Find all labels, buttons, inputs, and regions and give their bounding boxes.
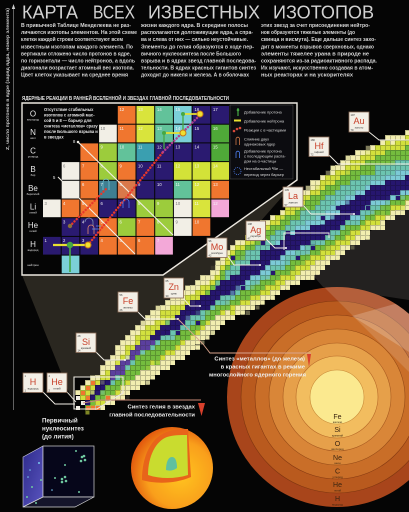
element card: He: гелий xyxy=(53,386,61,390)
caption: metals synthesis: многослойного ядерного горения xyxy=(209,372,306,378)
element card: Zn: 65 xyxy=(166,279,169,283)
cell numbers: 15 xyxy=(194,126,200,131)
leader end dots xyxy=(124,213,355,361)
element row labels: Be xyxy=(28,184,38,193)
element card: Mo: Mo xyxy=(211,242,223,252)
cell numbers: 6 xyxy=(120,220,122,224)
cell numbers: 11 xyxy=(138,144,143,150)
element row labels: углерод xyxy=(28,154,38,158)
cell numbers: 4 xyxy=(82,220,85,224)
cell numbers: 12 xyxy=(176,164,181,168)
element card: Fe: 56 xyxy=(120,293,123,297)
text block: column 3: сохраняются из-за радиоактивного распада. xyxy=(261,58,377,64)
cell numbers: 10 xyxy=(157,182,162,187)
cell numbers: 10 xyxy=(100,126,106,131)
title xyxy=(22,2,374,22)
small star: cut-away xyxy=(131,427,213,509)
element card: Si: 28 xyxy=(78,334,81,338)
element card: Zn: Zn xyxy=(168,282,179,292)
caption: primordial nucleosynthesis: нуклеосинтез xyxy=(42,426,84,432)
element card: He xyxy=(47,373,67,392)
element card: La: La xyxy=(288,191,298,201)
element card: Zn: цинк xyxy=(171,292,177,296)
text block: column 1: по горизонтали — число нейтронов, а вдоль xyxy=(21,58,135,64)
cell numbers: 7 xyxy=(120,201,122,206)
element card: Fe xyxy=(118,292,138,312)
cell numbers: 8 xyxy=(157,220,160,224)
text block: column 3: этих звезд за счет присоединения нейтро- xyxy=(261,22,370,29)
pink pointer: metals xyxy=(178,319,311,353)
cell numbers: 8 xyxy=(100,164,104,168)
element card: Mo: молибден xyxy=(211,252,223,255)
element card: H: 1 xyxy=(24,374,26,378)
big star element labels: O xyxy=(335,441,341,448)
cell numbers: 4 xyxy=(63,201,66,206)
text block: column 3: дит в моменты взрывов сверхновых, однако xyxy=(261,44,375,50)
inset heading: ЯДЕРНЫЕ РЕАКЦИИ В РАННЕЙ ВСЕЛЕННОЙ И ЗВЕЗДАХ ГЛАВНОЙ ПОСЛЕДОВАТЕЛЬНОСТИ xyxy=(22,94,229,102)
element card: Au: 79 xyxy=(350,128,354,132)
element card: Ag xyxy=(246,221,266,240)
big star element labels: кислород xyxy=(331,447,344,451)
reaction arcs xyxy=(85,179,129,234)
element row labels: гелий xyxy=(29,229,37,233)
element row labels: O xyxy=(30,110,36,118)
barrier labels xyxy=(53,139,76,180)
cell numbers: 11 xyxy=(176,182,181,187)
element card: Au: 197 xyxy=(350,113,355,117)
element card: Hf: Hf xyxy=(314,141,324,151)
icon: early universe cube xyxy=(23,446,94,507)
element card: Ag: серебро xyxy=(250,234,262,238)
vertical axis: Z: Z, число протонов в ядре (заряд ядра, номер элемента) xyxy=(5,8,11,150)
cell numbers: 3 xyxy=(44,201,48,206)
element card: Fe: 26 xyxy=(120,308,123,312)
barrier note: после Большого взрыва и xyxy=(44,129,98,134)
legend: одинаковых ядер xyxy=(244,142,275,146)
text block: column 3: Их изучают, искусственно создавая в атом- xyxy=(261,66,373,72)
text block: column 1: известным изотопам каждого элемента. По xyxy=(21,44,134,50)
cell numbers: 10 xyxy=(194,220,200,224)
barrier lines xyxy=(58,141,173,254)
element card: He: 2 xyxy=(48,388,50,392)
cell numbers: 11 xyxy=(194,201,200,206)
element card: H: 1 xyxy=(24,388,26,392)
big star element labels: Fe xyxy=(333,414,342,421)
big star element labels: Si xyxy=(334,427,341,434)
barrier note: Отсутствие стабильных xyxy=(44,107,94,112)
element card: Ag: Ag xyxy=(250,225,261,235)
cell numbers: 13 xyxy=(213,182,218,187)
cell numbers: 10 xyxy=(138,164,143,168)
cell numbers: 9 xyxy=(120,164,122,168)
cell numbers: 7 xyxy=(100,182,104,187)
cell numbers: 12 xyxy=(120,107,125,112)
cell numbers: 12 xyxy=(194,182,200,187)
cell numbers: 13 xyxy=(194,164,200,168)
element card: Si: Si xyxy=(82,337,90,347)
cell numbers: 5 xyxy=(100,220,104,224)
element row labels: бор xyxy=(31,173,36,177)
cell numbers: 6 xyxy=(100,201,104,206)
element card: Au: золото xyxy=(355,126,364,130)
big star element labels: железо xyxy=(333,420,343,424)
text block: column 1: В привычной Таблице Менделеева не раз- xyxy=(21,22,131,29)
element row labels: H xyxy=(30,240,36,249)
element card: Zn: 30 xyxy=(166,294,169,298)
cell numbers: 3 xyxy=(63,220,66,224)
text block: column 2: располагаются долгоживущие ядра, а спра- xyxy=(141,30,253,36)
element row labels: литий xyxy=(29,210,37,214)
element row labels: водород xyxy=(28,248,39,252)
element card: Mo: 42 xyxy=(208,254,212,258)
element card: Ag: 108 xyxy=(248,222,252,226)
cell numbers: 10 xyxy=(176,201,181,206)
cell numbers: 1 xyxy=(44,238,48,243)
cell numbers: 15 xyxy=(213,144,218,150)
text block: column 2: взрыва и в ядрах звезд главной последова- xyxy=(141,58,256,64)
element card: H: водород xyxy=(28,386,39,390)
element card: Hf: 180 xyxy=(310,138,315,142)
big star element labels: C xyxy=(335,468,340,476)
caption: helium synthesis xyxy=(109,404,196,418)
big star element labels: углерод xyxy=(332,475,343,479)
element row labels: азот xyxy=(30,136,36,140)
cell numbers: 12 xyxy=(157,144,162,150)
cell numbers: 14 xyxy=(213,164,218,168)
element row labels: Li xyxy=(30,202,36,212)
barrier labels: 5 xyxy=(53,175,56,180)
cell numbers: 9 xyxy=(157,201,160,206)
cell numbers: 4 xyxy=(100,238,104,243)
legend: Слияние двух xyxy=(244,136,269,142)
element row labels: B xyxy=(30,165,36,174)
element row labels: He xyxy=(28,221,39,230)
barrier note: сой 5 и 8 — барьер для xyxy=(44,118,92,123)
cell numbers: 7 xyxy=(82,164,85,168)
barrier note: синтеза «металлов» сразу xyxy=(44,124,98,128)
element card: Mo xyxy=(207,238,227,258)
text block: column 2: тельности. В ядрах красных гигантов синтез xyxy=(141,66,256,72)
element row labels: бериллий xyxy=(27,192,40,196)
cell numbers: 11 xyxy=(157,164,162,168)
text block: column 2: ва и слева от них — сильно неустойчивые. xyxy=(141,36,248,43)
element card: Au xyxy=(349,112,369,132)
cell numbers: 16 xyxy=(194,107,200,112)
cell numbers: 2 xyxy=(63,238,66,243)
cell numbers: 16 xyxy=(213,126,218,131)
isotope band xyxy=(76,130,409,412)
element row labels: C xyxy=(30,146,36,156)
legend xyxy=(230,105,293,179)
text block: column 2: жизни каждого ядра. В середине полосы xyxy=(140,23,248,29)
text block: column 1: вертикали отложено число протонов в ядре, xyxy=(21,51,131,57)
caption: primordial nucleosynthesis: (до лития) xyxy=(42,434,74,440)
text block: column 2 xyxy=(140,23,256,79)
cell numbers: 14 xyxy=(176,126,181,131)
legend: Нестабильный ⁸Be — xyxy=(244,166,283,171)
cell numbers: 7 xyxy=(138,220,141,224)
big star element labels: неон xyxy=(334,461,341,465)
cell numbers: 9 xyxy=(176,220,178,224)
big star element labels: гелий xyxy=(334,488,342,492)
element card: La xyxy=(283,187,303,207)
big star element labels: кремний xyxy=(332,434,343,438)
title: ИЗОТОПОВ xyxy=(273,2,374,22)
element card: Zn xyxy=(164,278,184,298)
title: ИЗВЕСТНЫХ xyxy=(148,2,260,22)
cell numbers: 5 xyxy=(120,238,122,243)
caption: helium synthesis: главной последовательности xyxy=(109,412,195,418)
text block: column 2: вичного нуклеосинтеза после Большого xyxy=(141,51,242,57)
cell numbers: 9 xyxy=(100,144,104,150)
barrier note: в звездах xyxy=(44,134,64,140)
projection wedge: inset to band xyxy=(22,180,297,405)
caption: primordial nucleosynthesis: Первичный xyxy=(42,418,78,424)
vertical axis: Z xyxy=(5,4,15,410)
small frame around light elements xyxy=(74,377,123,409)
element card: Si xyxy=(76,333,96,352)
cell numbers: 14 xyxy=(194,144,200,150)
marker: metals synthesis xyxy=(307,354,311,367)
big star element labels: водород xyxy=(332,502,343,506)
element card: Fe: Fe xyxy=(123,296,133,306)
text block: column 1: диагонали возрастает атомный вес изотопа. xyxy=(21,65,134,72)
big star: layered burning shells xyxy=(227,280,409,507)
text block: column 3: нов образуются тяжелые элементы (до xyxy=(261,29,355,36)
element card: Si: кремний xyxy=(81,346,92,350)
caption: metals synthesis xyxy=(209,356,306,378)
element card: Hf: гафний xyxy=(314,150,324,154)
cell numbers: 12 xyxy=(138,126,143,131)
element card: H: H xyxy=(30,377,36,387)
caption: metals synthesis: Синтез «металлов» (до железа) xyxy=(214,356,305,362)
cell numbers: 9 xyxy=(138,182,141,187)
cell numbers: 5 xyxy=(82,201,85,206)
big star element labels xyxy=(331,414,344,506)
cell numbers: 15 xyxy=(176,107,181,112)
cell numbers: 12 xyxy=(213,201,218,206)
barrier note: изотопов с атомной мас- xyxy=(44,112,95,118)
inset panel: nuclear reactions xyxy=(22,94,297,275)
legend: Добавление нейтрона xyxy=(244,118,285,124)
text block: column 1: личаются изотопы элементов. На этой схеме xyxy=(21,29,137,36)
caption: helium synthesis: Синтез гелия в звездах xyxy=(128,404,196,410)
element card: La: 139 xyxy=(284,188,289,192)
text block: column 3: элементы тяжелее урана в природе не xyxy=(261,51,369,57)
text block: column 3: свинца и висмута). Еще дальше синтез захо- xyxy=(261,37,376,43)
element row labels: N xyxy=(30,128,36,137)
cell numbers: 6 xyxy=(63,164,66,168)
text block: column 3: ных реакторах и на ускорителях xyxy=(261,73,354,79)
caption: metals synthesis: в красных гигантах в режиме xyxy=(221,364,306,370)
big star element labels: H xyxy=(335,496,340,503)
legend: Реакции с α-частицами xyxy=(244,128,286,132)
title: КАРТА xyxy=(22,2,78,22)
pink pointer: helium xyxy=(83,400,201,403)
marker: helium synthesis xyxy=(198,403,205,416)
cell numbers: 6 xyxy=(138,238,141,243)
element card: Si: 14 xyxy=(78,348,81,352)
cell numbers: 13 xyxy=(138,107,143,112)
cell numbers: 6 xyxy=(82,182,85,187)
legend: с последующим распа- xyxy=(244,154,286,158)
cell numbers: 13 xyxy=(157,126,162,131)
text block: column 1: Цвет клеток указывает на среднее время xyxy=(21,73,128,79)
big star element labels: He xyxy=(333,482,342,489)
element card: La: 57 xyxy=(284,203,288,207)
element card: H xyxy=(23,373,43,392)
projection wedge: band to star xyxy=(310,205,409,300)
cell numbers: 7 xyxy=(157,238,160,243)
cell numbers: 10 xyxy=(120,144,125,150)
cell numbers: 8 xyxy=(138,201,141,206)
barrier labels: 8 xyxy=(73,139,76,144)
cell numbers: 8 xyxy=(120,182,122,187)
element card: La: лантан xyxy=(288,200,298,204)
text block: column 2: доходит до никеля и железа. А в оболочках xyxy=(141,72,250,79)
element card: Hf xyxy=(309,137,329,156)
element card: Mo: 96 xyxy=(208,239,212,243)
cell numbers: 17 xyxy=(213,107,218,112)
text block: column 1: клетки каждой строки соответствуют всем xyxy=(21,36,123,43)
legend: Добавление протона xyxy=(244,110,283,114)
small frame interior xyxy=(74,377,123,409)
barrier note xyxy=(44,107,98,140)
title: ВСЕХ xyxy=(93,2,135,22)
reaction paths: alpha capture xyxy=(70,115,200,245)
element card: Fe: железо xyxy=(123,306,133,310)
element card: Au: Au xyxy=(353,116,365,126)
element row labels: нейтрон xyxy=(27,263,39,267)
element card: Ag: 47 xyxy=(248,236,251,240)
element card: Hf: 72 xyxy=(310,152,314,156)
element row labels xyxy=(27,110,40,267)
legend: Добавление протона xyxy=(244,148,283,154)
element card: He: 4 xyxy=(48,374,50,378)
text block: column 3 xyxy=(261,22,377,79)
cell numbers: 11 xyxy=(120,126,125,131)
text block: column 1 xyxy=(21,22,137,79)
legend: переход через барьер xyxy=(244,172,284,177)
element row labels: кислород xyxy=(27,118,39,122)
cell numbers: 3 xyxy=(82,238,85,243)
cell numbers: 14 xyxy=(157,107,162,112)
text block: column 2: Элементы до гелия образуются в ходе пер- xyxy=(141,43,254,50)
isotope cells xyxy=(43,106,229,273)
cell numbers: 13 xyxy=(176,144,181,150)
legend: дом на α-частицы xyxy=(244,158,276,164)
leader lines xyxy=(43,132,409,404)
neutron and proton addition markers xyxy=(53,111,203,272)
big star element labels: Ne xyxy=(333,455,342,462)
caption: primordial nucleosynthesis xyxy=(42,418,84,440)
cell numbers xyxy=(44,107,218,243)
element card: He: He xyxy=(51,377,63,387)
